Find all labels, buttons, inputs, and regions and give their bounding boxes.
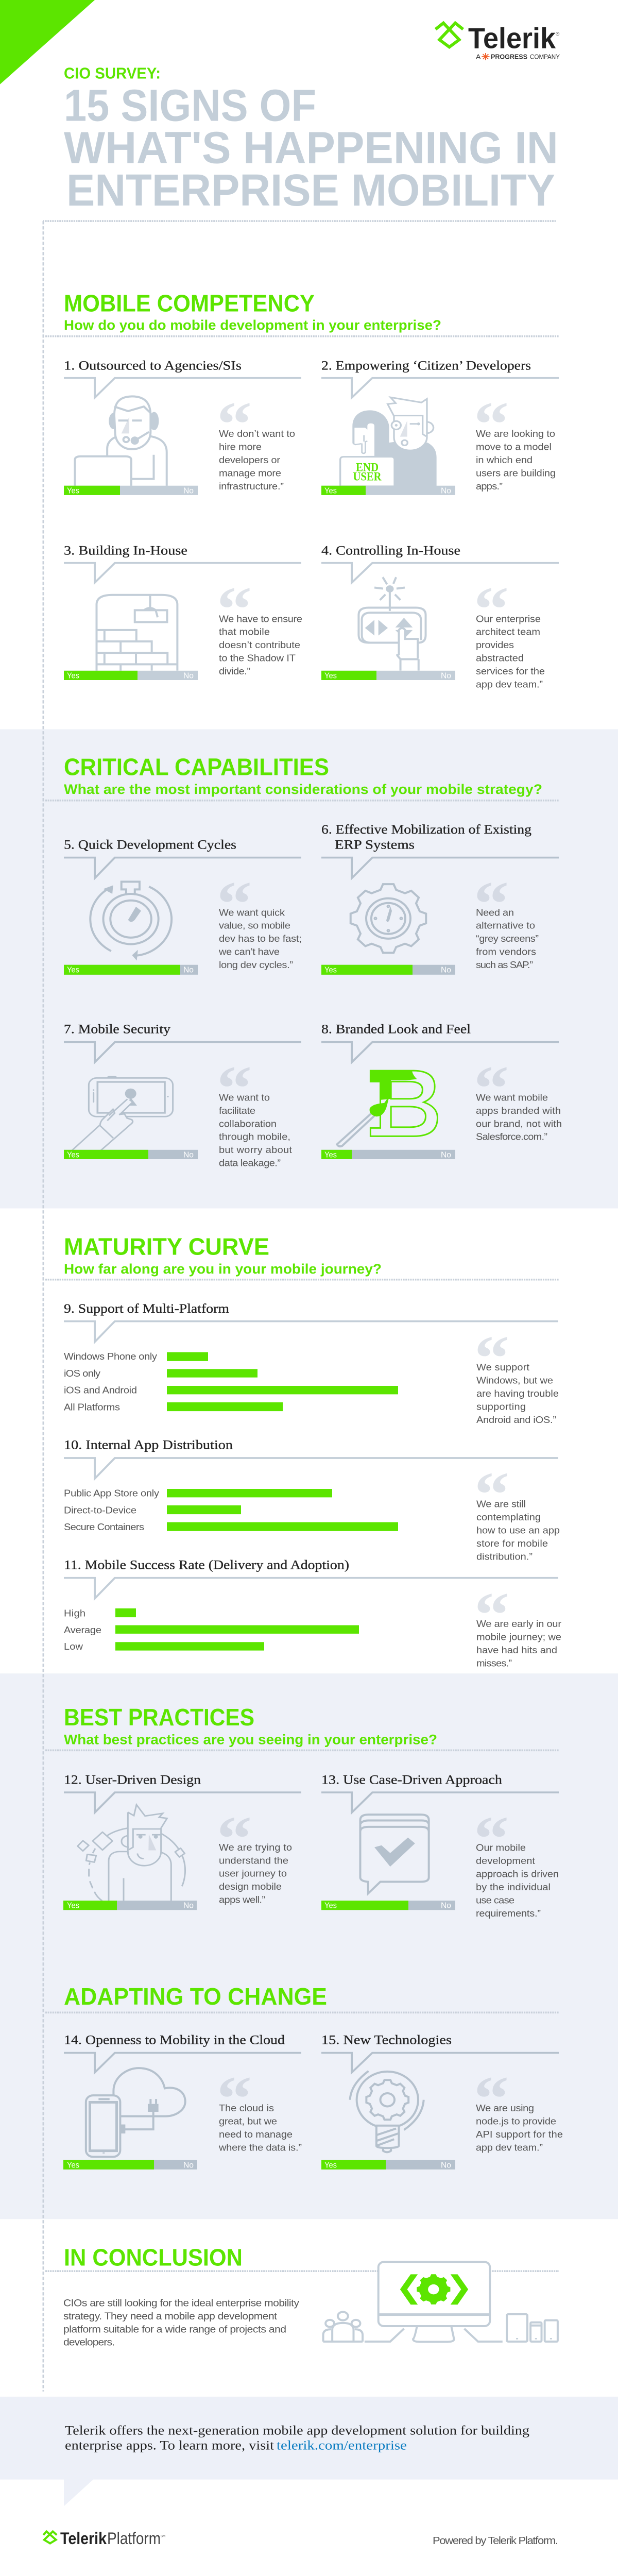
quote text: We are looking to [476,429,555,439]
quote text: use case [476,1895,514,1906]
yes/no bar: No [441,1901,451,1910]
call to action text: Telerik offers the next-generation mobile app development solution for building [65,2423,529,2437]
panel: item 6 [321,822,559,975]
icon: phone with touch [72,1076,173,1150]
quote text: The cloud is [219,2104,274,2114]
quote text [476,1363,559,1426]
quote text [219,1093,293,1168]
panel background: best practices and adapting to change [0,1673,618,2219]
panel: item 15 [321,2032,563,2170]
quote text: alternative to [476,921,535,931]
yes/no bar: Yes [324,1901,337,1910]
heading 9: 9. Support of Multi-Platform [64,1301,229,1316]
quote text: misses.” [476,1658,512,1669]
conclusion text [63,2298,299,2348]
quote text: divide.” [219,667,250,677]
bar chart: platforms: iOS and Android [64,1385,137,1396]
sign text: end user [353,461,382,483]
quote text: collaboration [219,1119,277,1129]
corner triangle [0,0,95,84]
quote text: We support [476,1363,530,1373]
quote text: from vendors [476,947,536,957]
section heading: best practices: BEST PRACTICES [64,1704,254,1731]
icon: headset agent [75,396,167,486]
yes/no bar: Yes [324,671,337,680]
yes/no bar [64,486,198,495]
quote text: distribution.” [476,1552,533,1562]
yes/no bar [63,1901,197,1910]
quote text: where the data is.” [218,2143,302,2153]
bar chart: distribution: Secure Containers [64,1522,144,1533]
quote text: apps.” [476,482,503,492]
icon: gear gauge [351,884,426,953]
quote text: value, so mobile [219,921,290,931]
bar chart: success rate: Average [64,1625,101,1636]
logo: Telerik: COMPANY [530,53,560,60]
yes/no bar [321,2160,455,2170]
quote text: provides [476,640,514,651]
section heading: maturity curve: MATURITY CURVE [64,1234,269,1260]
quote mark: “ [474,1459,509,1530]
section heading: mobile competency [64,291,441,333]
quote text: app dev team.” [476,2143,543,2153]
quote text: Android and iOS.” [476,1415,556,1426]
quote text: abstracted [476,653,524,664]
sign text: end user: USER [353,470,382,483]
callout line [64,1042,301,1062]
quote text: we can’t have [218,947,280,957]
quote text: such as SAP.” [476,960,533,971]
callout line [64,858,301,878]
quote text: We don’t want to [219,429,295,439]
quote mark: “ [217,2063,252,2134]
quote text [476,1619,562,1669]
quote mark: “ [474,1580,509,1650]
quote text [476,1499,560,1562]
callout line [321,2053,559,2073]
icon: end user [340,397,437,486]
quote text [218,908,302,971]
quote text: how to use an app [476,1526,560,1536]
icon: brick wall [96,595,177,671]
quote text: We are trying to [219,1843,292,1853]
section heading: adapting to change: ADAPTING TO CHANGE [64,1984,327,2010]
quote text: “grey screens” [476,934,539,944]
callout line [64,2053,301,2073]
yes/no bar: No [441,486,451,495]
panel background: critical capabilities [0,729,618,1208]
callout line [321,1792,559,1812]
quote text: long dev cycles.” [219,960,293,971]
quote text: infrastructure.” [219,482,284,492]
yes/no bar: Yes [67,2161,79,2170]
conclusion text: developers. [63,2337,115,2348]
logo: Telerik: ® [556,31,559,37]
quote text: that mobile [219,628,270,637]
logo: Telerik Platform: SM [161,2535,165,2538]
quote text [476,1093,562,1142]
section heading: in conclusion: IN CONCLUSION [64,2244,243,2271]
quote text: Salesforce.com.” [476,1132,547,1142]
yes/no bar: No [441,2161,451,2170]
bar chart: distribution: Direct-to-Device [64,1505,136,1516]
quote text: app dev team.” [476,680,543,690]
yes/no bar: Yes [67,486,79,495]
quote text: facilitate [219,1106,255,1116]
panel: item 2 [321,358,559,495]
quote text: We have to ensure [219,614,302,624]
quote text: by the individual [476,1883,551,1893]
yes/no bar: No [183,2161,194,2170]
quote text [219,429,295,492]
logo: Telerik Platform: Telerik [60,2530,107,2548]
quote text: approach is driven [476,1869,559,1879]
quote text: We want mobile [476,1093,548,1103]
quote text: requirements.” [476,1909,541,1919]
panel: item 10 [64,1437,560,1562]
yes/no bar [321,671,455,680]
section heading: critical capabilities: What are the most important considerations of your mobile strategy? [64,782,542,798]
quote mark: “ [217,1053,252,1124]
heading 6: ERP Systems [335,837,415,852]
section heading: best practices: What best practices are you seeing in your enterprise? [64,1732,437,1748]
quote text: store for mobile [476,1539,548,1549]
yes/no bar: No [183,671,194,680]
quote text: Need an [476,908,514,918]
quote text: but worry about [219,1145,293,1156]
bar chart: platforms: iOS only [64,1369,100,1379]
quote text: We want quick [219,908,285,918]
quote text: dev has to be fast; [219,934,302,944]
section heading: mobile competency: MOBILE COMPETENCY [64,291,315,317]
yes/no bar: No [183,1150,194,1159]
quote text [476,908,539,971]
quote text: developers or [219,455,281,466]
heading 11: 11. Mobile Success Rate (Delivery and Adoption) [64,1557,349,1572]
bar chart: distribution: Public App Store only [64,1488,159,1499]
quote text: We want to [219,1093,270,1103]
heading 4: 4. Controlling In-House [321,543,460,557]
logo: Telerik: A [476,53,480,60]
quote text [476,614,545,690]
section heading: mobile competency: How do you do mobile development in your enterprise? [64,317,441,333]
quote mark: “ [474,869,509,939]
section heading: critical capabilities: CRITICAL CAPABILITIES [64,754,329,781]
panel: item 5 [64,837,302,975]
heading 13: 13. Use Case-Driven Approach [321,1772,503,1787]
heading 1: 1. Outsourced to Agencies/SIs [64,358,242,372]
yes/no bar: Yes [324,486,337,495]
quote text: We are using [476,2104,534,2114]
call to action text [65,2423,529,2452]
heading 10: 10. Internal App Distribution [64,1437,233,1452]
quote text: have had hits and [476,1646,557,1656]
quote text: contemplating [476,1513,541,1523]
quote text: apps branded with [476,1106,561,1116]
heading 14: 14. Openness to Mobility in the Cloud [64,2032,285,2047]
quote text: hire more [219,442,262,452]
quote mark: “ [474,1053,509,1124]
yes/no bar: No [441,965,451,974]
logo: Telerik Platform: Platform [107,2530,161,2548]
yes/no bar: Yes [324,965,337,974]
logo: Telerik Platform [43,2530,165,2548]
quote text [476,1843,559,1919]
yes/no bar [64,671,198,680]
quote text: apps well.” [219,1895,265,1905]
quote text: node.js to provide [476,2116,556,2127]
callout line [64,563,301,583]
quote text: data leakage.” [219,1158,281,1168]
quote text: through mobile, [219,1132,290,1142]
heading 3: 3. Building In-House [64,543,187,557]
title: 15 SIGNS OF [64,81,316,131]
title: ENTERPRISE MOBILITY [66,165,555,215]
quote text: our brand, not with [476,1119,562,1129]
callout line [64,1792,301,1812]
call to action text: enterprise apps. To learn more, visit [65,2438,274,2452]
quote mark: “ [474,389,509,460]
quote text: to the Shadow IT [219,653,296,664]
quote mark: “ [474,574,509,645]
call to action text: telerik.com/enterprise [277,2438,407,2452]
quote text: great, but we [219,2116,277,2127]
bar chart: success rate: Low [64,1642,83,1652]
quote text: in which end [476,455,533,466]
quote text: mobile journey; we [476,1632,561,1642]
bar chart: platforms: All Platforms [64,1402,120,1413]
quote text: understand the [219,1856,288,1866]
conclusion text: strategy. They need a mobile app development [63,2311,277,2322]
quote text: We are early in our [476,1619,562,1630]
heading 6: 6. Effective Mobilization of Existing [321,822,531,837]
heading 12: 12. User-Driven Design [64,1772,201,1787]
icon: platform monitor with users and devices [323,2262,558,2342]
icon: stopwatch [90,882,171,960]
callout line [321,1042,559,1062]
quote mark: “ [474,2063,509,2134]
yes/no bar: Yes [324,1150,337,1159]
logo: Telerik: ✳ [482,52,490,62]
icon: user with journey [78,1805,185,1901]
heading 15: 15. New Technologies [321,2032,452,2047]
conclusion text: platform suitable for a wide range of projects and [63,2324,286,2335]
quote text: Our mobile [476,1843,526,1853]
quote mark: “ [217,389,252,460]
panel: item 1 [64,358,301,495]
panel: item 11 [64,1557,562,1669]
heading 5: 5. Quick Development Cycles [64,837,236,852]
quote text: users are building [476,468,556,479]
quote text [476,2104,563,2153]
yes/no bar [64,1150,198,1159]
icon: stacked message with check [360,1815,429,1893]
quote text: manage more [219,468,281,479]
yes/no bar: No [183,1901,194,1910]
heading 7: 7. Mobile Security [64,1022,171,1036]
logo: Telerik [436,22,560,62]
quote mark: “ [217,574,252,645]
bar chart: success rate [64,1608,359,1652]
quote mark: “ [474,1804,509,1874]
quote text: Our enterprise [476,614,541,624]
panel: item 13 [321,1772,559,1919]
icon: light bulb with gear [350,2071,424,2152]
yes/no bar [321,1150,455,1159]
icon: phone plugged into cloud [86,2068,185,2157]
section heading: critical capabilities [64,754,542,798]
callout line [64,1321,558,1342]
quote text [219,614,302,677]
conclusion text: CIOs are still looking for the ideal enterprise mobility [63,2298,299,2309]
yes/no bar: Yes [67,965,79,974]
quote text: doesn’t contribute [219,640,300,651]
bar chart: platforms: Windows Phone only [64,1352,157,1362]
logo: Telerik: PROGRESS [491,53,527,60]
bar chart: platforms [64,1352,398,1413]
quote text: design mobile [219,1882,282,1892]
panel: item 7 [64,1022,301,1168]
section heading: best practices [64,1704,437,1748]
callout line [321,378,559,398]
quote text: We are still [476,1499,526,1510]
yes/no bar [321,965,455,975]
call to action panel [0,2397,618,2506]
yes/no bar: Yes [67,1901,79,1910]
quote text: services for the [476,667,545,677]
quote text [476,429,556,492]
sign text: end user: END [356,461,379,474]
callout line [321,563,559,583]
yes/no bar [64,965,198,975]
logo: Telerik: Telerik [468,22,556,55]
yes/no bar: No [441,1150,451,1159]
yes/no bar [321,1901,455,1910]
callout line [321,858,559,878]
heading 6 [321,822,531,852]
footer note: Powered by Telerik Platform. [433,2535,558,2547]
yes/no bar [63,2160,197,2170]
quote text: need to manage [219,2130,293,2140]
heading 8: 8. Branded Look and Feel [321,1022,471,1036]
title: WHAT'S HAPPENING IN [64,123,558,173]
panel: item 12 [63,1772,301,1910]
yes/no bar: No [441,671,451,680]
quote text: move to a model [476,442,552,452]
icon: touch controls [358,577,426,671]
yes/no bar: Yes [67,671,79,680]
callout line [64,1458,558,1479]
quote mark: “ [217,1804,252,1874]
quote text: Windows, but we [476,1376,553,1386]
quote text [219,1843,292,1905]
quote text: user journey to [219,1869,287,1879]
bar chart: success rate: High [64,1608,85,1619]
panel: item 8 [321,1022,562,1159]
panel: item 9 [64,1301,559,1426]
section heading: maturity curve: How far along are you in your mobile journey? [64,1261,382,1277]
panel: item 3 [64,543,302,680]
heading 2: 2. Empowering ‘Citizen’ Developers [321,358,531,372]
yes/no bar: Yes [324,2161,337,2170]
quote text: API support for the [476,2130,563,2140]
callout line [64,1578,558,1599]
icon: painted letter B [337,1071,437,1146]
title [64,81,558,215]
quote mark: “ [474,1323,509,1394]
yes/no bar: Yes [67,1150,79,1159]
quote text [218,2104,302,2153]
panel: item 4 [321,543,559,690]
section heading: maturity curve [64,1234,382,1277]
quote text: are having trouble [476,1389,559,1399]
panel: item 14 [63,2032,302,2170]
yes/no bar: No [183,965,194,974]
quote text: supporting [476,1402,526,1412]
survey label: CIO SURVEY: [64,64,161,82]
bar chart: distribution [64,1488,398,1533]
yes/no bar [321,486,455,495]
quote mark: “ [217,869,252,939]
quote text: development [476,1856,536,1867]
yes/no bar: No [183,486,194,495]
quote text: architect team [476,628,540,637]
callout line [64,378,301,398]
